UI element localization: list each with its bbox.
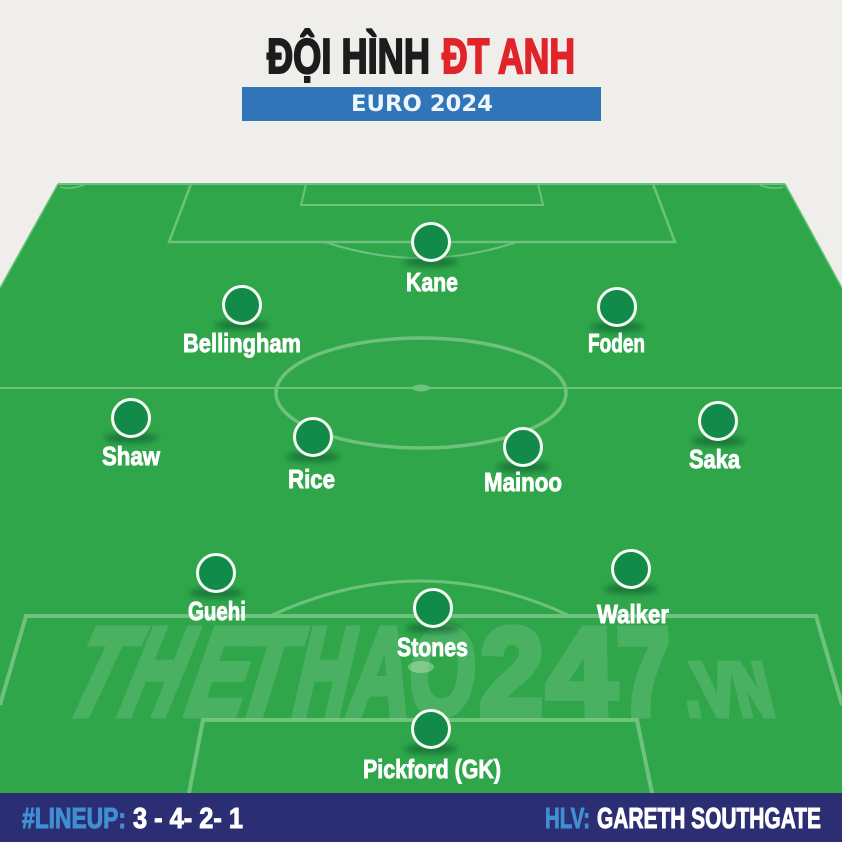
watermark: H <box>283 602 369 742</box>
title: ĐỘI HÌNH <box>267 29 430 84</box>
player: Walker <box>597 550 669 629</box>
watermark: . <box>676 648 705 731</box>
player: Stones: Stones <box>397 632 468 662</box>
player: Pickford (GK): Pickford (GK) <box>363 754 501 784</box>
watermark: A <box>342 602 422 742</box>
player: Pickford (GK) <box>363 710 501 784</box>
watermark: T <box>220 603 316 742</box>
watermark: E <box>171 603 276 742</box>
player: Mainoo <box>484 428 562 497</box>
player: Foden <box>588 288 645 358</box>
player: Guehi <box>188 554 246 626</box>
player: Kane: Kane <box>406 267 458 297</box>
subtitle banner: Euro 2024 <box>242 87 601 121</box>
subtitle banner: Euro 2024: EURO 2024 <box>351 92 493 117</box>
player: Shaw: Shaw <box>102 441 161 471</box>
title: ĐT ANH <box>442 30 575 84</box>
watermark: O <box>405 602 481 742</box>
player: Saka <box>689 402 745 474</box>
formation: #LINEUP: <box>22 803 126 835</box>
formation <box>22 803 243 835</box>
player: Walker: Walker <box>597 599 669 629</box>
player: Kane <box>404 224 458 297</box>
coach: HLV: <box>545 803 590 835</box>
player: Rice: Rice <box>288 464 335 494</box>
formation: 3 - 4- 2- 1 <box>133 803 243 835</box>
watermark: 7 <box>614 602 675 742</box>
watermark: V <box>688 648 745 731</box>
watermark: N <box>724 648 780 731</box>
player: Bellingham: Bellingham <box>183 328 301 358</box>
player: Mainoo: Mainoo <box>484 467 562 497</box>
player: Rice <box>286 418 340 494</box>
footer bar <box>0 793 842 842</box>
player: Saka: Saka <box>689 444 740 474</box>
player: Stones <box>397 590 468 662</box>
watermark: T <box>44 602 161 742</box>
player: Guehi: Guehi <box>188 596 246 626</box>
watermark <box>44 602 780 742</box>
football pitch <box>0 184 842 793</box>
watermark: H <box>103 602 216 742</box>
player: Shaw <box>102 400 161 471</box>
watermark: 2 <box>479 603 545 742</box>
player: Bellingham <box>183 286 301 358</box>
player: Foden: Foden <box>588 328 645 358</box>
watermark: 4 <box>545 603 617 742</box>
pitch markings <box>0 184 842 793</box>
